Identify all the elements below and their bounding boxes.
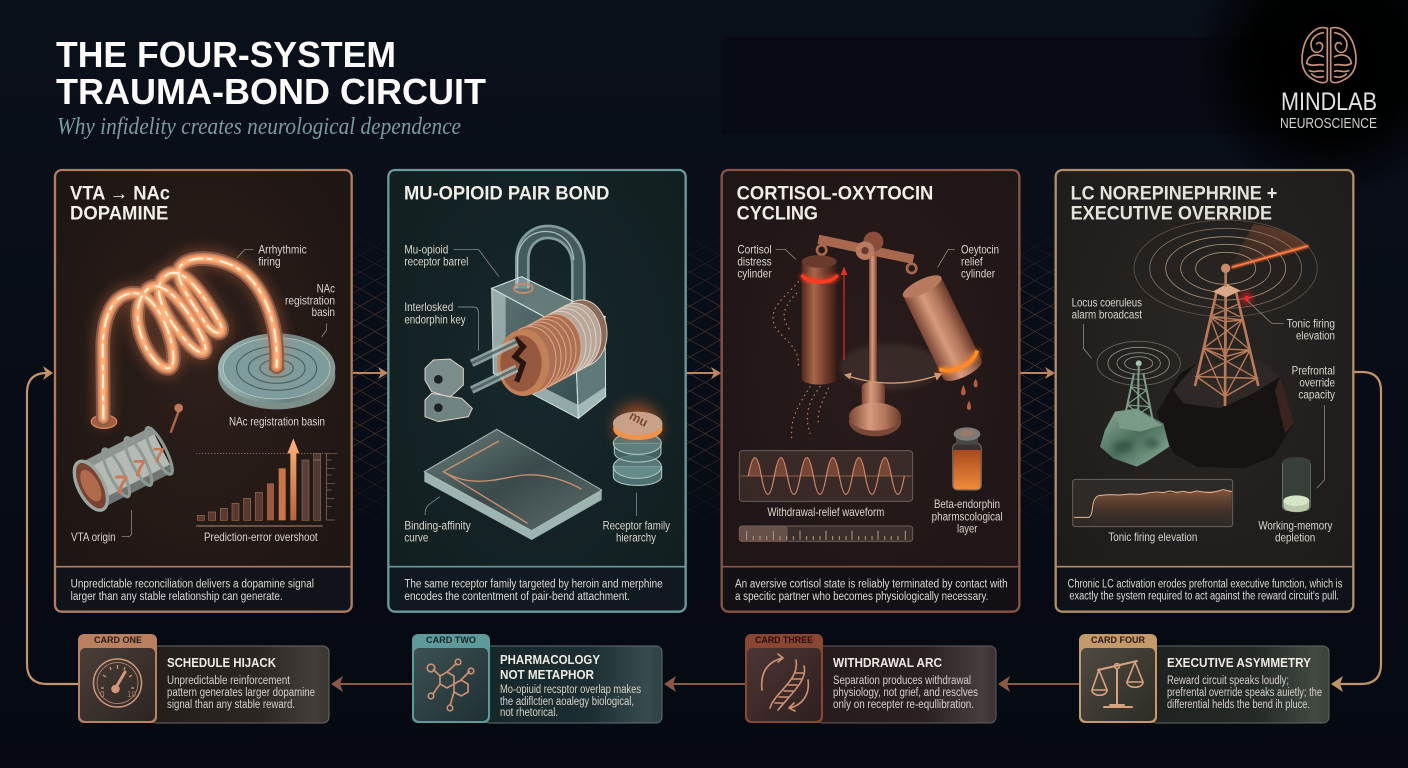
- panel footer text: An aversive cortisol state is reliably terminated by contact with: [735, 576, 1008, 590]
- padlock and barrel: [492, 231, 607, 418]
- callout labels: depletion: [1275, 532, 1315, 545]
- large copper tower on dark rock: [1157, 264, 1294, 468]
- card two: pharmacology not metaphor: CARD TWO: [426, 635, 476, 646]
- panel footer text: encodes the contentment of pair-bend attachment.: [404, 589, 630, 603]
- card text: Separation produces withdrawal: [833, 675, 971, 687]
- icon: brain: [1302, 28, 1356, 83]
- panel footer text: exactly the system required to act against the reward circuit's pull.: [1069, 588, 1339, 602]
- logo: MindLab Neuroscience: NEUROSCIENCE: [1280, 115, 1377, 132]
- heading: MU-OPIOID PAIR BOND: [404, 183, 609, 204]
- panel footer text: The same receptor family targeted by heroin and merphine: [404, 576, 663, 590]
- icon: gauge: 0: [100, 690, 105, 699]
- tonic firing chart: [1073, 479, 1233, 527]
- callout labels: Interlosked: [404, 301, 453, 314]
- icon: molecule: [427, 659, 474, 711]
- leader lines: [425, 249, 637, 516]
- callout labels: Mu-opioid: [404, 244, 448, 257]
- panel footer text: [1068, 576, 1342, 602]
- arrow: card two to card one: [331, 676, 413, 692]
- callout labels: Binding-affinity: [404, 520, 471, 533]
- card text: Unpredictable reinforcement: [167, 675, 291, 687]
- heading: [70, 183, 170, 224]
- callout labels: alarm broadcast: [1072, 308, 1143, 321]
- callout labels: endorphin key: [404, 313, 466, 326]
- slot-machine VTA origin: 7: [133, 456, 146, 483]
- panel footer text: Unpredictable reconciliation delivers a dopamine signal: [71, 576, 314, 590]
- callout labels: Oeytocin: [961, 244, 999, 257]
- card text: NOT METAPHOR: [500, 668, 594, 682]
- heading: CYCLING: [737, 203, 818, 224]
- card text: not rhetorical.: [500, 707, 558, 719]
- card text: [833, 656, 978, 711]
- arrow: panel one to panel two: [353, 367, 388, 379]
- callout labels: Prediction-error overshoot: [204, 531, 318, 544]
- callout labels: layer: [957, 523, 977, 536]
- card text: prefrental override speaks auietly; the: [1167, 687, 1322, 699]
- leader lines: [1083, 300, 1324, 488]
- icon: gauge: [94, 659, 142, 707]
- callout labels: cylinder: [737, 268, 772, 281]
- heading: [1071, 183, 1277, 224]
- panel footer text: a specitic partner who becomes physiologically necessary.: [735, 589, 988, 603]
- logo: MindLab Neuroscience: MINDLAB: [1281, 88, 1377, 116]
- callout labels: [404, 244, 670, 545]
- icon: scales: [1092, 661, 1143, 707]
- card one: schedule hijack: [78, 634, 329, 723]
- card three: withdrawal arc: [745, 634, 996, 723]
- callout labels: relief: [961, 256, 983, 269]
- leader lines: [776, 249, 955, 267]
- arrow: left loop from card one to panel one: [27, 366, 78, 684]
- title: [56, 34, 486, 112]
- card text: signal than any stable reward.: [167, 699, 295, 711]
- slot-machine VTA origin: 7: [153, 444, 165, 468]
- arrow: card four to card three: [998, 676, 1080, 692]
- card four: executive asymmetry: CARD FOUR: [1091, 635, 1145, 646]
- callout labels: capacity: [1298, 389, 1335, 402]
- card text: pattern generates larger dopamine: [167, 687, 315, 699]
- card text: physiology, not grief, and resclves: [833, 687, 978, 699]
- callout labels: NAc registration basin: [229, 416, 325, 429]
- subtitle: Why infidelity creates neurological dependence: [57, 114, 461, 140]
- callout labels: firing: [258, 256, 281, 269]
- card text: [167, 656, 315, 711]
- callout labels: curve: [404, 532, 428, 545]
- callout labels: distress: [737, 256, 772, 269]
- cortisol distress cylinder: [773, 255, 847, 438]
- card text: SCHEDULE HIJACK: [167, 656, 276, 670]
- binding-affinity plate: [424, 429, 602, 540]
- callout labels: receptor barrel: [404, 256, 468, 269]
- card two: pharmacology not metaphor: [412, 634, 662, 723]
- callout labels: Arrhythmic: [258, 244, 307, 257]
- card text: EXECUTIVE ASYMMETRY: [1167, 656, 1312, 670]
- callout labels: pharmscological: [932, 511, 1003, 524]
- beta-endorphin vial: [953, 427, 981, 490]
- card text: Mo-opiuid recsptor overlap makes: [500, 684, 641, 696]
- callout labels: Prefrontal: [1292, 364, 1335, 377]
- callout labels: registration: [285, 295, 335, 308]
- callout labels: [1072, 296, 1335, 545]
- card text: PHARMACOLOGY: [500, 653, 601, 667]
- card text: [500, 653, 641, 719]
- panel footer text: [404, 576, 663, 603]
- callout labels: Tonic firing elevation: [1108, 531, 1197, 544]
- prediction-error bar chart: [196, 438, 337, 526]
- panel: LC norepinephrine and executive override: [1056, 170, 1353, 612]
- callout labels: Cortisol: [737, 244, 772, 257]
- slot-machine VTA origin: [67, 404, 183, 515]
- panel: cortisol-oxytocin cycling: [722, 170, 1019, 612]
- arrow: card three to card two: [664, 676, 746, 692]
- heading: [737, 183, 933, 224]
- receptor family stack: mu: [627, 409, 650, 430]
- callout labels: [71, 244, 335, 544]
- alarm broadcast rings: [1134, 220, 1317, 317]
- callout labels: Beta-endorphin: [934, 498, 1000, 511]
- card one: schedule hijack: CARD ONE: [94, 635, 142, 646]
- panel: mu-opioid pair bond: [388, 170, 686, 612]
- icon: DNA with cycle arrows: [762, 654, 808, 711]
- callout labels: Withdrawal-relief waveform: [767, 506, 884, 519]
- callout labels: basin: [312, 306, 335, 319]
- callout labels: [737, 244, 1003, 536]
- ruler gauge: [739, 526, 913, 541]
- arrow: right loop from panel four to card four: [1331, 372, 1381, 692]
- callout labels: VTA origin: [71, 531, 116, 544]
- title: THE FOUR-SYSTEM: [56, 34, 396, 75]
- callout labels: hierarchy: [616, 532, 656, 545]
- callout labels: Locus coeruleus: [1072, 296, 1142, 309]
- balance beam apparatus: [817, 232, 940, 436]
- heading: LC NOREPINEPHRINE +: [1071, 183, 1277, 204]
- arrow: panel two to panel three: [686, 367, 721, 379]
- slot-machine VTA origin: 7: [114, 469, 128, 499]
- background: [353, 0, 1408, 516]
- panel footer text: [735, 576, 1008, 603]
- callout labels: NAc: [317, 283, 335, 296]
- card three: withdrawal arc: CARD THREE: [755, 635, 813, 646]
- heading: EXECUTIVE OVERRIDE: [1071, 203, 1272, 224]
- icon: gauge: 10: [127, 690, 136, 699]
- callout labels: cylinder: [961, 268, 995, 281]
- heading: DOPAMINE: [70, 203, 168, 224]
- card text: the adiflctien aoalegy biological,: [500, 696, 634, 708]
- heading: CORTISOL-OXYTOCIN: [737, 183, 933, 204]
- withdrawal-relief waveform: [739, 451, 913, 501]
- card text: Reward circuit speaks loudly;: [1167, 675, 1289, 687]
- panel footer text: [71, 576, 314, 603]
- card text: [1167, 656, 1322, 711]
- title: TRAUMA-BOND CIRCUIT: [56, 71, 486, 112]
- working-memory jar: [1282, 457, 1310, 512]
- card four: executive asymmetry: [1079, 634, 1329, 723]
- card text: differential helds the bend ih pluce.: [1167, 699, 1310, 711]
- leader lines: [122, 249, 327, 537]
- callout labels: override: [1299, 377, 1335, 390]
- card text: only on recepter re-equllibration.: [833, 699, 974, 711]
- NAc basin: [218, 333, 335, 409]
- logo: MindLab Neuroscience: [1280, 28, 1377, 132]
- spiral firing tube: [91, 259, 277, 428]
- endorphin key: [425, 342, 517, 422]
- callout labels: Receptor family: [603, 520, 670, 533]
- panel footer text: larger than any stable relationship can generate.: [71, 589, 283, 603]
- card text: WITHDRAWAL ARC: [833, 656, 942, 670]
- receptor family stack: [613, 403, 662, 485]
- callout labels: Tonic firing: [1287, 318, 1335, 331]
- panel: VTA to NAc dopamine: [55, 170, 352, 612]
- oxytocin relief cylinder: [844, 271, 985, 410]
- heading: VTA → NAc: [70, 183, 170, 204]
- arrow: panel three to panel four: [1020, 367, 1055, 379]
- callout labels: Working-memory: [1258, 520, 1332, 533]
- small green tower on green rock: [1097, 341, 1180, 467]
- callout labels: elevation: [1296, 330, 1335, 343]
